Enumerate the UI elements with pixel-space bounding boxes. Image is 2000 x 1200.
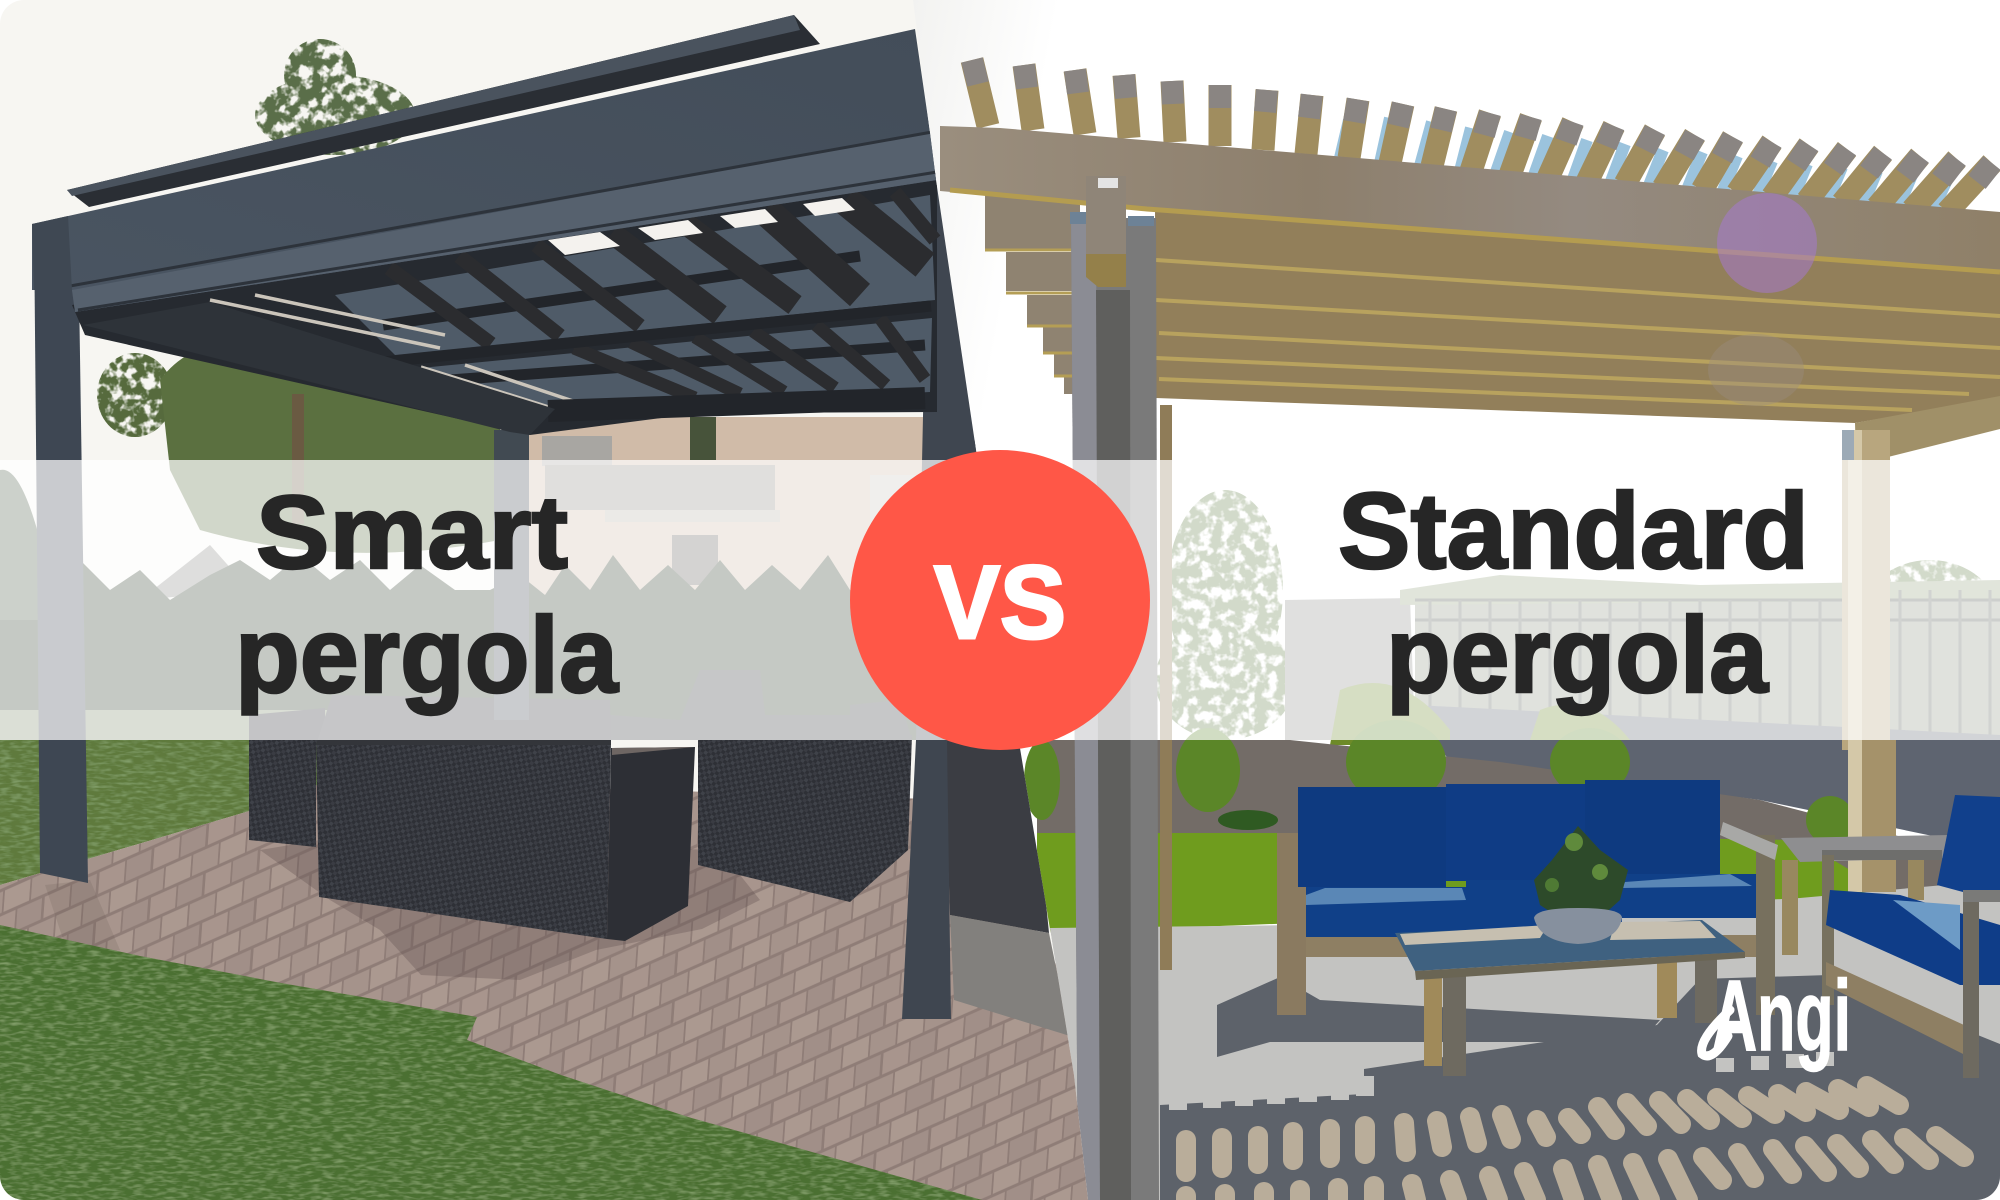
main sofa: [316, 695, 695, 941]
shrubs: [1024, 720, 1854, 844]
louver slabs: [210, 192, 935, 411]
slats on pergola roof: [972, 60, 1992, 212]
patio shadow: [1160, 975, 2000, 1200]
armchair: [1822, 795, 2000, 1078]
fin on top of roof: [67, 15, 820, 207]
roof underside: [1155, 208, 2000, 423]
right post: [1842, 430, 1896, 892]
right armchair: [698, 740, 912, 902]
potted plant: [1534, 826, 1628, 944]
small left armchair: [249, 708, 325, 847]
gravel bed: [1037, 740, 1990, 900]
VS badge: VS: [934, 545, 1066, 661]
left lawn: [0, 740, 330, 885]
artificial grass: [1037, 833, 1900, 933]
heading: Standard pergola: [1338, 470, 1809, 715]
heading: Smart pergola: Smart: [256, 475, 568, 591]
distant roof and lamp: [157, 545, 228, 598]
side table: [1781, 835, 1950, 955]
roof underside: [72, 172, 937, 435]
patio concrete: [1050, 880, 2000, 1200]
stepped joist ends: [985, 190, 1080, 394]
panel: smart pergola photo: [0, 0, 1100, 1200]
left post: [34, 290, 88, 883]
left hedge shade: [0, 470, 38, 574]
coffee table: [1395, 920, 1745, 1076]
sunlight stripes on patio: [1186, 1086, 1964, 1200]
post cap: [1070, 176, 1154, 287]
Angi logo: Angi: [1712, 960, 1851, 1072]
blue sofa: [1277, 780, 1778, 1015]
retaining wall: [1430, 740, 2000, 850]
heading: Smart pergola: [235, 475, 619, 715]
background house: [529, 417, 930, 607]
beam lower strip: [72, 132, 937, 312]
lens flare: [1717, 193, 1817, 293]
front post: [1071, 218, 1159, 1200]
roof joist highlights: [1156, 260, 2000, 410]
post shadow: [45, 880, 120, 950]
faint lens flare: [1708, 334, 1804, 406]
furniture shadow: [260, 840, 760, 980]
distant lawn in band: [0, 710, 330, 740]
translucent title band: [0, 460, 2000, 740]
paved patio: [0, 780, 1100, 1200]
side wall: [947, 440, 1049, 933]
gravel base: [950, 915, 1070, 1036]
thin rear post: [1160, 405, 1172, 970]
side beam: [1855, 396, 2000, 459]
tree below roof: [97, 344, 500, 553]
right post: [902, 185, 976, 1019]
front lawn: [0, 925, 982, 1200]
shadow edge teeth: [1178, 1052, 1825, 1110]
beam lower edge highlight: [950, 190, 2000, 272]
tree behind roof: [255, 39, 415, 155]
left side beam: [83, 302, 555, 435]
rear middle post: [494, 430, 529, 720]
background trees fence and wall: [1155, 490, 2000, 745]
heading: Smart pergola: pergola: [235, 594, 619, 715]
front roof beam: [32, 29, 937, 312]
sofa shadow: [1217, 977, 1660, 1057]
panel: standard pergola photo: [900, 0, 2000, 1200]
VS badge: [850, 450, 1150, 750]
beam corner panel: [32, 216, 72, 290]
main roof beam: [940, 126, 2000, 272]
heading: Standard pergola: Standard: [1338, 470, 1809, 591]
heading: Standard pergola: pergola: [1386, 594, 1769, 715]
conifer hedge: [0, 555, 916, 740]
Angi logo: [1702, 960, 1851, 1072]
beam detail line: [70, 132, 937, 310]
